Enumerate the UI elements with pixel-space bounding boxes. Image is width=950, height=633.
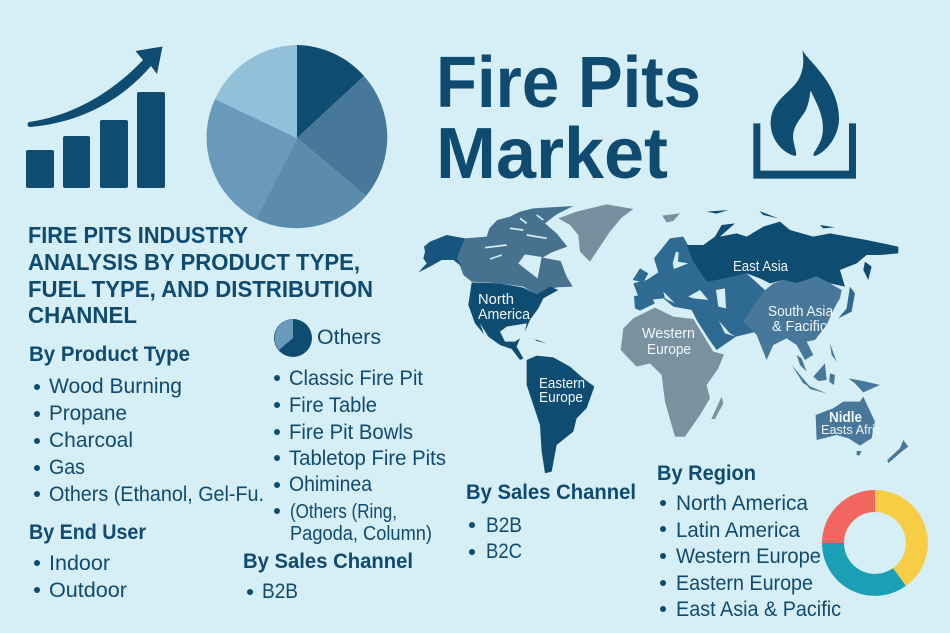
panel: by sales channel right: B2C: [486, 540, 522, 563]
panel: by product type: Others (Ethanol, Gel-Fu.: [49, 483, 264, 506]
panel: by product type: Wood Burning: [49, 375, 182, 398]
map region labels: [478, 258, 881, 437]
map region labels: East Asia: [733, 258, 789, 275]
panel: by region: East Asia & Pacific: [676, 598, 841, 621]
panel: by sales channel right: [466, 481, 636, 563]
main heading: ANALYSIS BY PRODUCT TYPE,: [28, 249, 360, 275]
others list: Fire Table: [289, 394, 377, 417]
map region labels: Western: [642, 325, 695, 342]
panel: by sales channel right: B2B: [486, 514, 522, 537]
map region labels: Europe: [647, 341, 691, 358]
map: South America: [527, 356, 594, 473]
icon: small pie: [274, 319, 312, 357]
others label: Others: [317, 326, 381, 349]
panel: by sales channel left: [243, 550, 413, 603]
map region labels: North: [478, 291, 514, 308]
map region labels: Europe: [539, 389, 583, 406]
others list: Pagoda, Column): [290, 523, 432, 545]
others list: [274, 367, 446, 545]
main heading: CHANNEL: [28, 302, 137, 328]
map: Russia: [687, 222, 898, 287]
icon: flame in fire pit: [753, 50, 856, 179]
map region labels: & Facific: [772, 318, 827, 335]
panel: by sales channel right: By Sales Channel: [466, 481, 636, 504]
panel: by product type: Gas: [49, 456, 85, 479]
title: Fire Pits: [436, 43, 701, 123]
map region labels: South Asia: [768, 303, 834, 320]
donut chart: [833, 501, 917, 585]
panel: by region: [657, 462, 841, 621]
others list: Fire Pit Bowls: [289, 421, 413, 444]
title: [436, 43, 701, 194]
panel: by region: Eastern Europe: [676, 572, 813, 595]
panel: by region: North America: [676, 492, 808, 515]
panel: by region: By Region: [657, 462, 756, 485]
others list: (Others (Ring,: [290, 501, 397, 523]
map: Australia and New Zealand: [816, 397, 908, 463]
panel: by end user: By End User: [29, 521, 146, 544]
map: North American north (Canada): [457, 206, 573, 295]
panel: by product type: By Product Type: [29, 343, 190, 366]
map region labels: Eastern: [539, 375, 585, 392]
panel: by end user: [29, 521, 146, 602]
map: Iceland: [662, 213, 680, 222]
map: Africa: [621, 308, 724, 437]
panel: by region: Western Europe: [676, 545, 821, 568]
others list: Ohiminea: [289, 473, 372, 496]
panel: by product type: Propane: [49, 402, 127, 425]
map: Europe, Middle East and Central Asia: [633, 237, 855, 350]
icon: rising bar chart with arrow: [26, 46, 165, 188]
map: United States and Mexico: [468, 282, 558, 360]
main heading: FIRE PITS INDUSTRY: [28, 222, 248, 248]
pie chart: [207, 45, 387, 228]
panel: others: [274, 319, 446, 545]
panel: by sales channel left: By Sales Channel: [243, 550, 413, 573]
others list: Tabletop Fire Pits: [289, 447, 446, 470]
map region labels: Easts Afric: [821, 422, 881, 437]
map region labels: America: [478, 306, 531, 323]
others list: Classic Fire Pit: [289, 367, 423, 390]
map: Alaska: [418, 235, 465, 272]
panel: by product type: Charcoal: [49, 429, 133, 452]
panel: by end user: Indoor: [49, 552, 110, 575]
panel: by sales channel left: B2B: [262, 580, 298, 603]
world map: [418, 204, 908, 473]
map: Greenland: [558, 204, 633, 262]
title: Market: [436, 114, 668, 194]
panel: by product type: [29, 343, 264, 506]
map: Sakhalin and Arctic islands: [707, 210, 872, 280]
map region labels: Nidle: [829, 409, 862, 426]
map: South Asia and Pacific: [743, 277, 880, 393]
panel: by region: Latin America: [676, 519, 800, 542]
main heading: [28, 222, 373, 328]
panel: by end user: Outdoor: [49, 579, 127, 602]
main heading: FUEL TYPE, AND DISTRIBUTION: [28, 276, 373, 302]
